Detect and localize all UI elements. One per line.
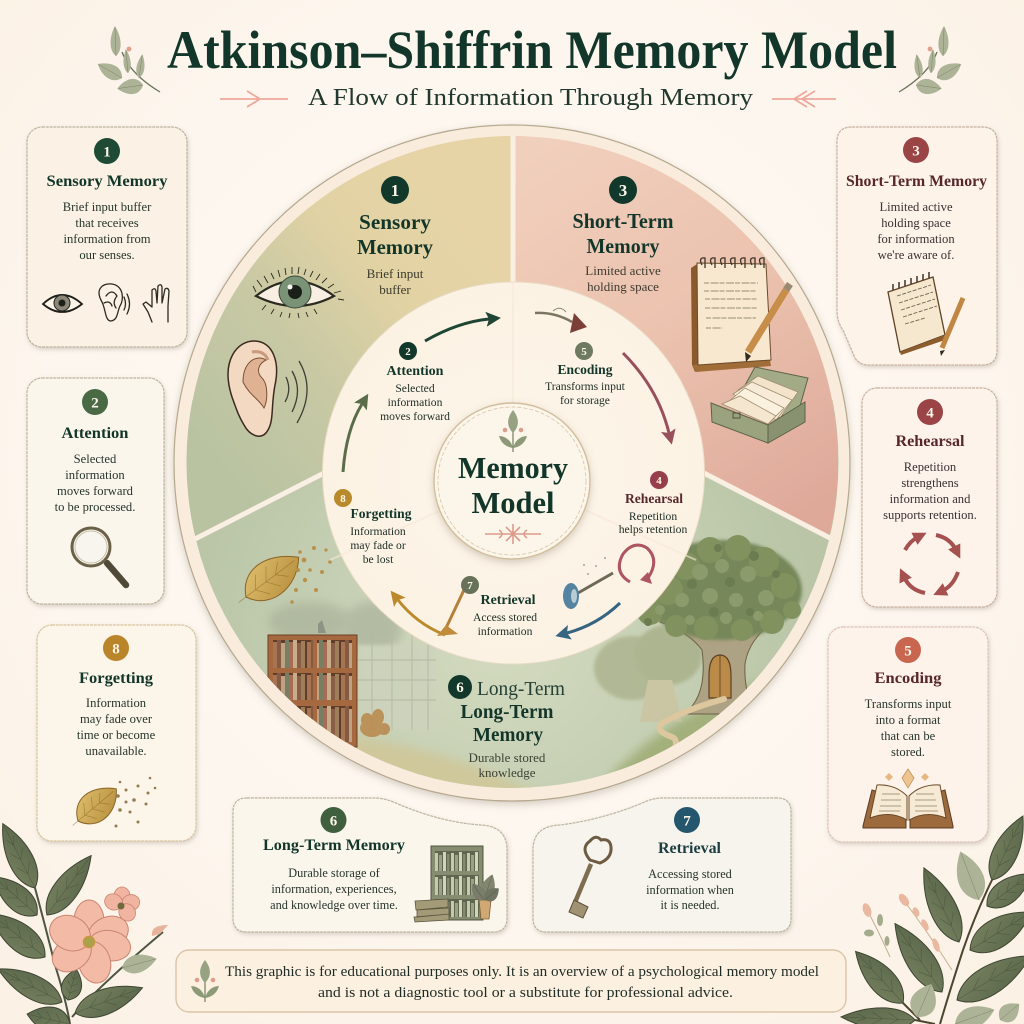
icon: antique key: [569, 837, 611, 918]
panel: short-term memory card: for information: [877, 232, 955, 246]
text: wheel long-term memory: knowledge: [478, 765, 536, 780]
icon: large eye: [253, 267, 344, 318]
icon: notepad and pencil: [691, 258, 790, 372]
text: wheel sensory memory: Sensory: [359, 210, 431, 234]
panel: encoding card: Transforms input: [865, 697, 952, 711]
panel: short-term memory card: Limited active: [879, 200, 953, 214]
panel: sensory memory card: [27, 127, 187, 347]
arrow: encoding toward rehearsal: [623, 353, 669, 433]
illustration: autumn bush: [360, 709, 390, 737]
panel: retrieval card: Accessing stored: [648, 867, 732, 881]
icon: eye: [43, 295, 82, 312]
text: encoding step: for storage: [560, 394, 610, 407]
text: rehearsal step: [619, 471, 687, 536]
icon: open book with sparkles: [863, 769, 953, 828]
panel: long-term memory card: Long-Term Memory: [263, 837, 405, 854]
panel: encoding card: into a format: [875, 713, 941, 727]
text: wheel long-term memory: [448, 675, 565, 780]
panel: rehearsal card: strengthens: [901, 476, 959, 490]
panel: short-term memory card: holding space: [881, 216, 951, 230]
icon: small pink flower: [102, 887, 141, 924]
text: wheel short-term memory: 3: [619, 181, 627, 200]
illustration: faded building and trees: [268, 602, 436, 730]
text: wheel long-term memory: Long-Term: [460, 701, 554, 723]
panel: encoding card: [828, 627, 988, 842]
arrow: sensory to short-term: [425, 319, 489, 341]
text: rehearsal step: helps retention: [619, 523, 687, 536]
text: wheel short-term memory: [572, 176, 674, 294]
panel: forgetting card: 8: [112, 642, 120, 658]
inner flow circle: [322, 282, 704, 664]
text: wheel sensory memory: [357, 176, 433, 297]
illustration: ghost tree: [594, 625, 702, 722]
icon: large ear with sound waves: [228, 341, 307, 436]
panel: retrieval card: Retrieval: [658, 840, 722, 857]
panel: retrieval card: it is needed.: [660, 898, 720, 912]
text: encoding step: [545, 342, 626, 407]
text: retrieval step: information: [478, 625, 533, 638]
text: attention step: 2: [405, 346, 411, 358]
text: wheel long-term memory: Long-Term: [477, 678, 565, 700]
panel: long-term memory card: 6: [330, 814, 338, 830]
panel: rehearsal card: Rehearsal: [896, 433, 965, 450]
icon: bookshelf with plant: [414, 846, 503, 922]
illustration: winding path: [656, 696, 727, 746]
panel: forgetting card: Forgetting: [79, 670, 153, 687]
text: attention step: moves forward: [380, 410, 450, 423]
right subtitle arrow: [772, 91, 836, 107]
panel: rehearsal card: [862, 388, 997, 607]
icon: right title sprig: [899, 26, 965, 96]
text: rehearsal step: Repetition: [629, 510, 677, 523]
panel: long-term memory card: [233, 798, 507, 932]
panel: long-term memory card: Durable storage of: [288, 866, 381, 880]
text: wheel sensory memory: buffer: [379, 282, 411, 297]
arrow: retrieval to forgetting: [398, 600, 445, 635]
central memory wheel: [174, 125, 850, 810]
panel: long-term memory card: and knowledge over time.: [270, 898, 398, 912]
text: wheel long-term memory: 6: [456, 680, 464, 696]
text: wheel sensory memory: Memory: [357, 235, 433, 259]
icon: rehearsal swirl and key: [563, 545, 654, 609]
text: wheel long-term memory: Durable stored: [469, 750, 546, 765]
text: wheel short-term memory: Limited active: [585, 263, 661, 278]
panel: encoding card: that can be: [881, 729, 936, 743]
text: retrieval step: [461, 576, 537, 638]
icon: notebook and pencil: [888, 272, 963, 356]
segment dividers: [195, 136, 830, 539]
panel: encoding card: stored.: [891, 745, 925, 759]
arrow: forgetting to attention: [343, 404, 362, 472]
panel: attention card: 2: [91, 396, 99, 412]
text: retrieval step: 7: [467, 580, 473, 592]
text: wheel sensory memory: Brief input: [367, 266, 424, 281]
panel: attention card: [27, 378, 164, 604]
illustration: falling leaf: [238, 546, 332, 604]
icon: disclaimer sprig: [191, 960, 219, 1002]
text: forgetting step: Information: [350, 525, 406, 538]
panel: forgetting card: unavailable.: [85, 744, 147, 758]
icon: smudged arrow: [535, 308, 587, 333]
panel: short-term memory card: 3: [912, 144, 920, 160]
icon: rehearsal cycle arrows: [904, 535, 958, 593]
panel: retrieval card: 7: [683, 814, 691, 830]
panel: rehearsal card: supports retention.: [883, 508, 977, 522]
icon: index card box: [711, 367, 808, 443]
illustration: oak tree with door: [637, 535, 802, 714]
panel: short-term memory segment: [513, 136, 838, 538]
panel: encoding card: Encoding: [874, 670, 942, 687]
disclaimer: [176, 950, 846, 1012]
text: encoding step: 5: [581, 346, 587, 358]
text: wheel sensory memory: 1: [391, 181, 399, 200]
title: Atkinson–Shiffrin Memory Model: [167, 20, 897, 80]
panel: sensory memory card: information from: [63, 232, 151, 246]
center circle: Memory: [458, 450, 568, 485]
icon: magnifying glass: [72, 528, 126, 585]
panel: forgetting card: Information: [86, 696, 147, 710]
text: forgetting step: 8: [340, 493, 346, 505]
text: encoding step: Transforms input: [545, 380, 626, 393]
panel: long-term memory segment: [180, 400, 850, 810]
text: retrieval step: Retrieval: [480, 593, 536, 608]
icon: dissolving leaf: [63, 777, 156, 837]
panel: attention card: information: [65, 468, 125, 482]
text: attention step: information: [388, 396, 443, 409]
text: attention step: Selected: [395, 382, 435, 395]
panel: attention card: Attention: [62, 425, 129, 442]
text: forgetting step: [334, 489, 412, 566]
center circle: Model: [472, 485, 555, 520]
botanical: bottom-right leaf branch: [841, 811, 1024, 1024]
panel: short-term memory card: [837, 127, 997, 365]
panel: forgetting card: time or become: [77, 728, 156, 742]
disclaimer: This graphic is for educational purposes only. It is an overview of a psychological memory model: [225, 964, 819, 980]
text: forgetting step: may fade or: [350, 539, 406, 552]
panel: retrieval card: [533, 798, 791, 932]
panel: rehearsal card: 4: [926, 406, 934, 422]
panel: retrieval card: information when: [646, 883, 734, 897]
panel: sensory memory card: 1: [103, 144, 111, 160]
panel: attention card: moves forward: [57, 484, 134, 498]
text: rehearsal step: Rehearsal: [625, 492, 683, 507]
panel: long-term memory card: information, experiences,: [271, 882, 397, 896]
panel: sensory memory card: our senses.: [79, 248, 135, 262]
left subtitle arrow: [220, 91, 288, 107]
botanical: bottom-left flower branch: [0, 818, 168, 1024]
panel: forgetting card: [37, 625, 196, 841]
panel: rehearsal card: Repetition: [904, 460, 957, 474]
text: wheel short-term memory: Short-Term: [572, 209, 674, 233]
text: wheel short-term memory: holding space: [587, 279, 659, 294]
text: rehearsal step: 4: [656, 475, 662, 487]
text: attention step: Attention: [386, 364, 444, 379]
panel: sensory memory card: Brief input buffer: [63, 200, 152, 214]
icon: brass key at retrieval: [437, 590, 464, 636]
text: forgetting step: Forgetting: [350, 507, 412, 522]
panel: attention card: to be processed.: [55, 500, 135, 514]
text: encoding step: Encoding: [558, 363, 612, 378]
text: wheel long-term memory: Memory: [473, 724, 543, 746]
icon: large pink flower: [44, 900, 134, 987]
icon: hand: [143, 285, 169, 322]
text: retrieval step: Access stored: [473, 611, 537, 624]
panel: attention card: Selected: [74, 452, 117, 466]
panel: sensory memory segment: [187, 136, 513, 539]
arrow: rehearsal toward retrieval: [567, 603, 620, 633]
panel: sensory memory card: that receives: [75, 216, 139, 230]
subtitle: A Flow of Information Through Memory: [308, 85, 753, 111]
icon: ear: [99, 284, 130, 321]
text: forgetting step: be lost: [363, 553, 394, 566]
outer ring: [174, 125, 850, 801]
disclaimer: and is not a diagnostic tool or a substitute for professional advice.: [318, 985, 733, 1001]
panel: short-term memory card: we're aware of.: [878, 248, 954, 262]
text: wheel short-term memory: Memory: [586, 234, 660, 258]
panel: encoding card: 5: [904, 644, 912, 660]
panel: forgetting card: may fade over: [80, 712, 153, 726]
illustration: ground hills: [348, 678, 756, 788]
panel: rehearsal card: information and: [890, 492, 971, 506]
text: attention step: [380, 342, 450, 423]
panel: short-term memory card: Short-Term Memory: [846, 173, 987, 190]
panel: sensory memory card: Sensory Memory: [46, 173, 168, 190]
icon: left title sprig: [94, 26, 160, 96]
center circle: [434, 403, 590, 559]
illustration: bookcase: [268, 620, 357, 747]
